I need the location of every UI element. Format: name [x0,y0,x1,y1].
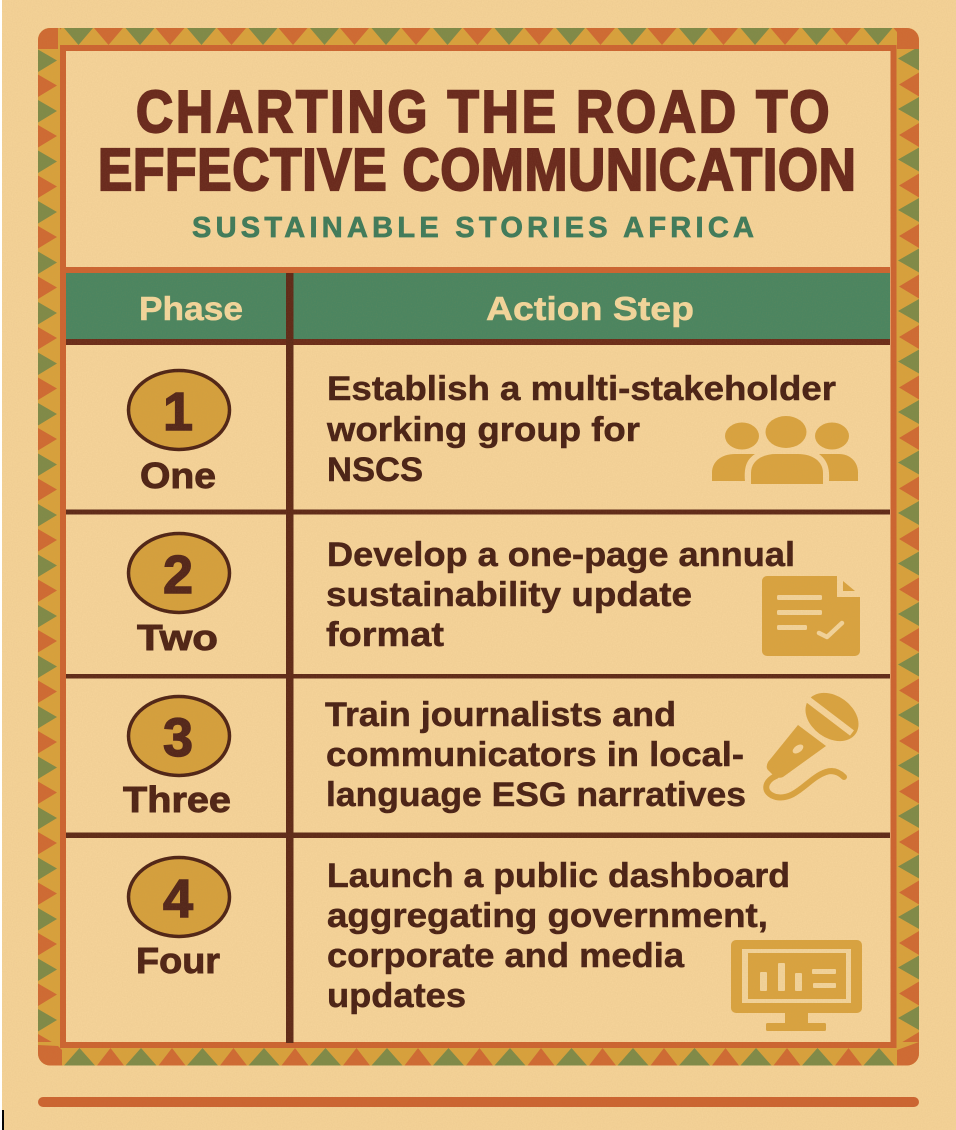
title: CHARTING THE ROAD TO [136,79,829,145]
action text 2: format [326,616,444,654]
phase badge 1 [128,370,230,450]
title: EFFECTIVE COMMUNICATION [98,137,856,203]
row 2 [128,534,860,658]
action text 4 [327,857,790,1015]
action text 2: sustainability update [326,576,692,614]
table header band [66,267,890,345]
action text 2 [326,536,795,654]
header: Action Step: Action Step [486,290,694,327]
phase badge 1: 1 [163,382,193,442]
subtitle: SUSTAINABLE STORIES AFRICA [192,212,754,244]
phase badge 4: 4 [163,869,193,929]
icon: microphone [766,683,868,797]
title [98,79,856,203]
bottom bar [38,1097,919,1107]
action text 3: language ESG narratives [326,776,746,814]
action text 3: Train journalists and [325,696,676,734]
phase badge 2 [128,534,230,612]
phase label: Two: Two [137,617,218,658]
header: Phase: Phase [139,290,243,327]
action text 4: corporate and media [327,937,685,975]
row 4 [128,857,862,1031]
action text 1: Establish a multi-stakeholder [327,370,836,408]
phase badge 2: 2 [163,545,193,605]
phase label: Four: Four [136,940,220,981]
phase label: One: One [140,455,216,496]
action text 1 [326,370,836,489]
icon: people [712,416,858,484]
icon: document with check [762,576,860,656]
action text 2: Develop a one-page annual [327,536,795,574]
action text 1: NSCS [327,451,423,489]
action text 1: working group for [326,411,640,449]
action text 3 [325,696,746,814]
phase label: Three: Three [123,779,231,820]
row 3 [123,683,868,820]
inner panel [63,48,894,1045]
phase badge 3 [128,696,230,776]
row 1 [128,370,858,496]
phase badge 3: 3 [163,708,193,768]
table grid lines [66,273,890,1043]
action text 4: aggregating government, [327,897,768,935]
action text 4: Launch a public dashboard [327,857,790,895]
action text 4: updates [327,977,466,1015]
icon: dashboard monitor [731,940,862,1031]
action text 3: communicators in local- [326,736,744,774]
phase badge 4 [128,858,230,936]
